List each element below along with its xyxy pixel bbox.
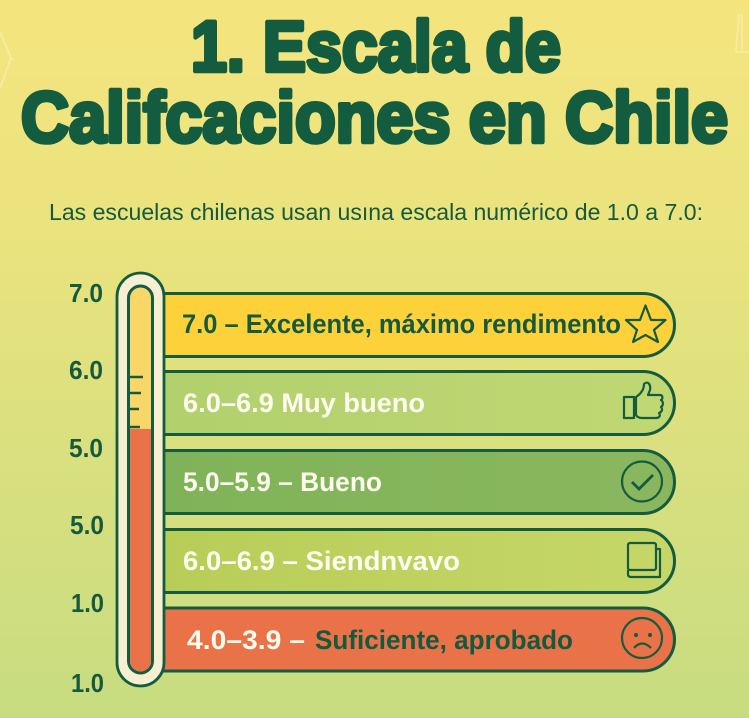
scale labels: 1.0	[71, 668, 104, 698]
thermometer ticks	[130, 377, 143, 427]
decorative corner outlines	[0, 14, 749, 88]
band: 6.0-6.9 siendnvavo: 6.0–6.9 – Siendnvavo	[183, 546, 460, 576]
icon: sad face	[622, 618, 662, 658]
band: 7.0 excelente	[160, 294, 674, 356]
band: 5.0-5.9 bueno: 5.0–5.9 – Bueno	[183, 467, 382, 497]
scale labels: 5.0	[70, 510, 104, 540]
scale labels: 5.0	[69, 433, 103, 463]
icon: star	[626, 306, 666, 342]
band: 7.0 excelente: 7.0 – Excelente, máximo rendimento	[182, 309, 621, 339]
band: 4.0-3.9 suficiente: 4.0–3.9 –	[187, 625, 305, 655]
band: 6.0-6.9 muy bueno	[160, 372, 674, 434]
band: 6.0-6.9 muy bueno: 6.0–6.9 Muy bueno	[183, 388, 425, 418]
band: 4.0-3.9 suficiente: Suficiente, aprobado	[315, 625, 573, 655]
icon: check circle	[622, 462, 662, 502]
thermometer	[117, 273, 164, 686]
thermometer fill	[130, 429, 151, 672]
scale labels	[69, 278, 104, 698]
icon: thumbs up	[624, 383, 663, 418]
scale labels: 7.0	[69, 278, 103, 308]
band: 4.0-3.9 suficiente	[160, 608, 674, 671]
title: 1. Escala de	[191, 8, 561, 87]
title	[21, 8, 728, 158]
scale labels: 6.0	[69, 355, 103, 385]
band: 6.0-6.9 siendnvavo	[160, 530, 674, 592]
icon: stacked squares	[628, 543, 660, 577]
subtitle: Las escuelas chilenas usan usına escala numérico de 1.0 a 7.0:	[49, 199, 703, 225]
scale labels: 1.0	[71, 588, 104, 618]
band: 5.0-5.9 bueno	[160, 450, 674, 514]
